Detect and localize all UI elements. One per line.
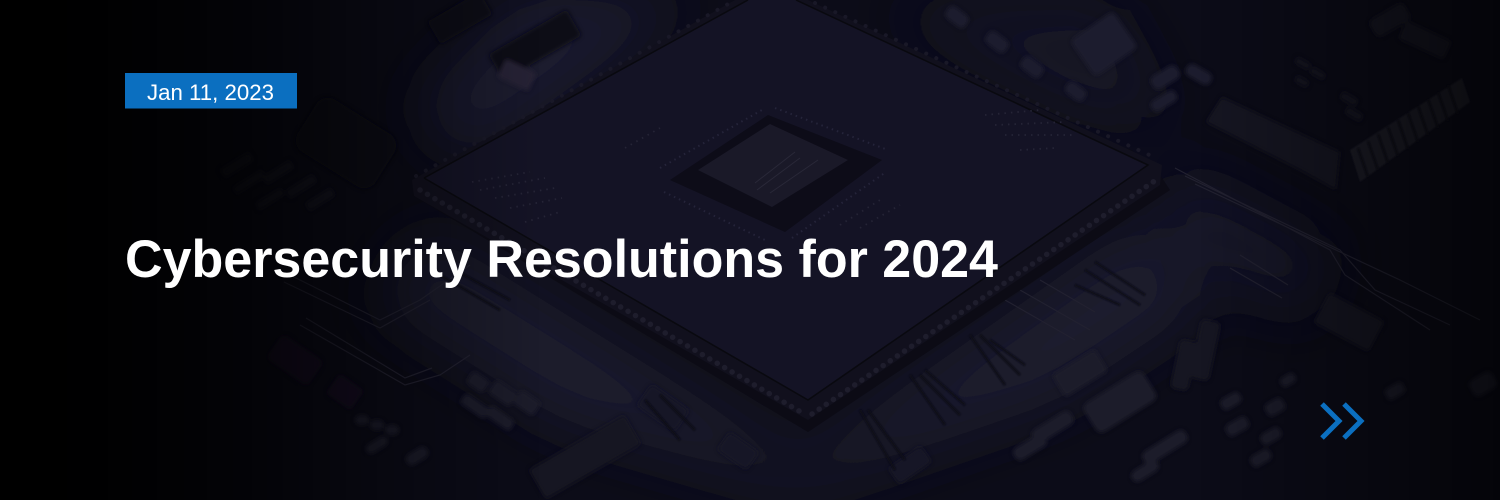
- upper left connector and strips: [291, 92, 401, 194]
- chip printed dots: [472, 110, 1075, 228]
- icon: double chevron arrow: [1322, 404, 1361, 438]
- right-hand striped connector: [1350, 78, 1470, 182]
- upper right parts: [943, 4, 1214, 114]
- right-hand module: [1206, 97, 1340, 190]
- chip top surface: [424, 0, 1148, 400]
- chip pins along lower edges: [420, 180, 1156, 415]
- date badge: [125, 73, 297, 108]
- lower left parts: [266, 333, 932, 499]
- chip base and shadow: [412, 160, 1170, 432]
- lower right parts: [1011, 349, 1499, 484]
- title: Cybersecurity Resolutions for 2024: [125, 230, 999, 289]
- chip rim: [412, 0, 1162, 420]
- board glow around chip: [370, 0, 1340, 490]
- date badge: Jan 11, 2023: [147, 80, 274, 105]
- circuit traces: [284, 168, 1480, 385]
- centre die: [660, 108, 888, 240]
- lower legs: [440, 262, 1145, 470]
